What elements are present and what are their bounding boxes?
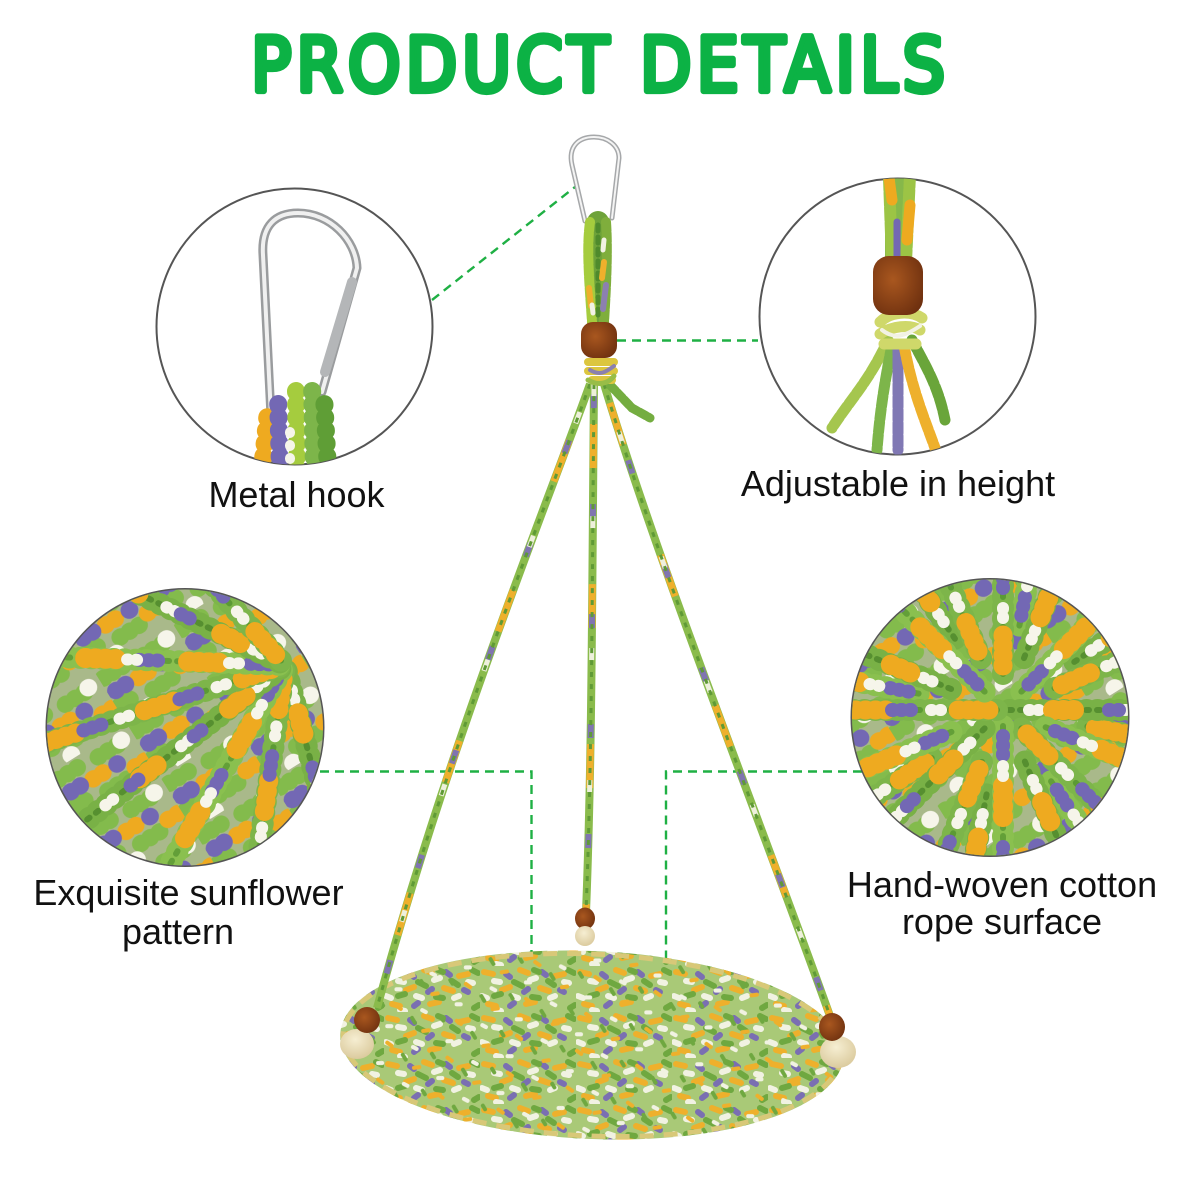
woven disc bbox=[340, 950, 842, 1140]
label: adjustable in height: Adjustable in height bbox=[741, 463, 1055, 504]
panel: sunflower pattern bbox=[46, 588, 324, 867]
title: PRODUCT DETAILS bbox=[251, 21, 945, 109]
wooden beads: left bbox=[340, 1007, 380, 1059]
panel: rope surface bbox=[850, 578, 1130, 857]
wooden beads: centre bbox=[575, 908, 595, 946]
label: sunflower pattern: Exquisite sunflower bbox=[33, 872, 344, 913]
adjustable knot and tail bbox=[588, 362, 650, 418]
carabiner close-up bbox=[262, 213, 357, 470]
top carabiner bbox=[571, 137, 619, 221]
panel: adjustable in height bbox=[760, 175, 1036, 454]
circle outline bbox=[852, 580, 1128, 856]
radial crochet close-up bbox=[852, 580, 1128, 856]
label: sunflower pattern bbox=[33, 872, 344, 952]
panel: metal hook bbox=[156, 188, 432, 470]
connector: metal hook bbox=[432, 187, 575, 300]
rope and bead close-up bbox=[832, 175, 945, 450]
label: rope surface bbox=[847, 864, 1157, 942]
wooden beads: right bbox=[819, 1013, 856, 1068]
rope loop above bead bbox=[588, 222, 607, 322]
crochet close-up bbox=[47, 590, 323, 866]
connector: sunflower pattern bbox=[320, 772, 532, 968]
rope in hook bbox=[262, 384, 328, 470]
circle outline bbox=[47, 590, 323, 866]
label: rope surface: Hand-woven cotton bbox=[847, 864, 1157, 905]
product: hanging swing bbox=[330, 137, 860, 1150]
connector: adjustable height bbox=[617, 339, 758, 342]
hanging ropes bbox=[377, 384, 830, 1016]
label: rope surface: rope surface bbox=[902, 901, 1102, 942]
circle outline bbox=[156, 188, 432, 464]
label: metal hook: Metal hook bbox=[208, 474, 386, 515]
wooden bead: adjuster bbox=[581, 322, 617, 358]
connector: rope surface bbox=[666, 772, 862, 970]
label: sunflower pattern: pattern bbox=[122, 911, 234, 952]
circle outline bbox=[760, 178, 1036, 454]
